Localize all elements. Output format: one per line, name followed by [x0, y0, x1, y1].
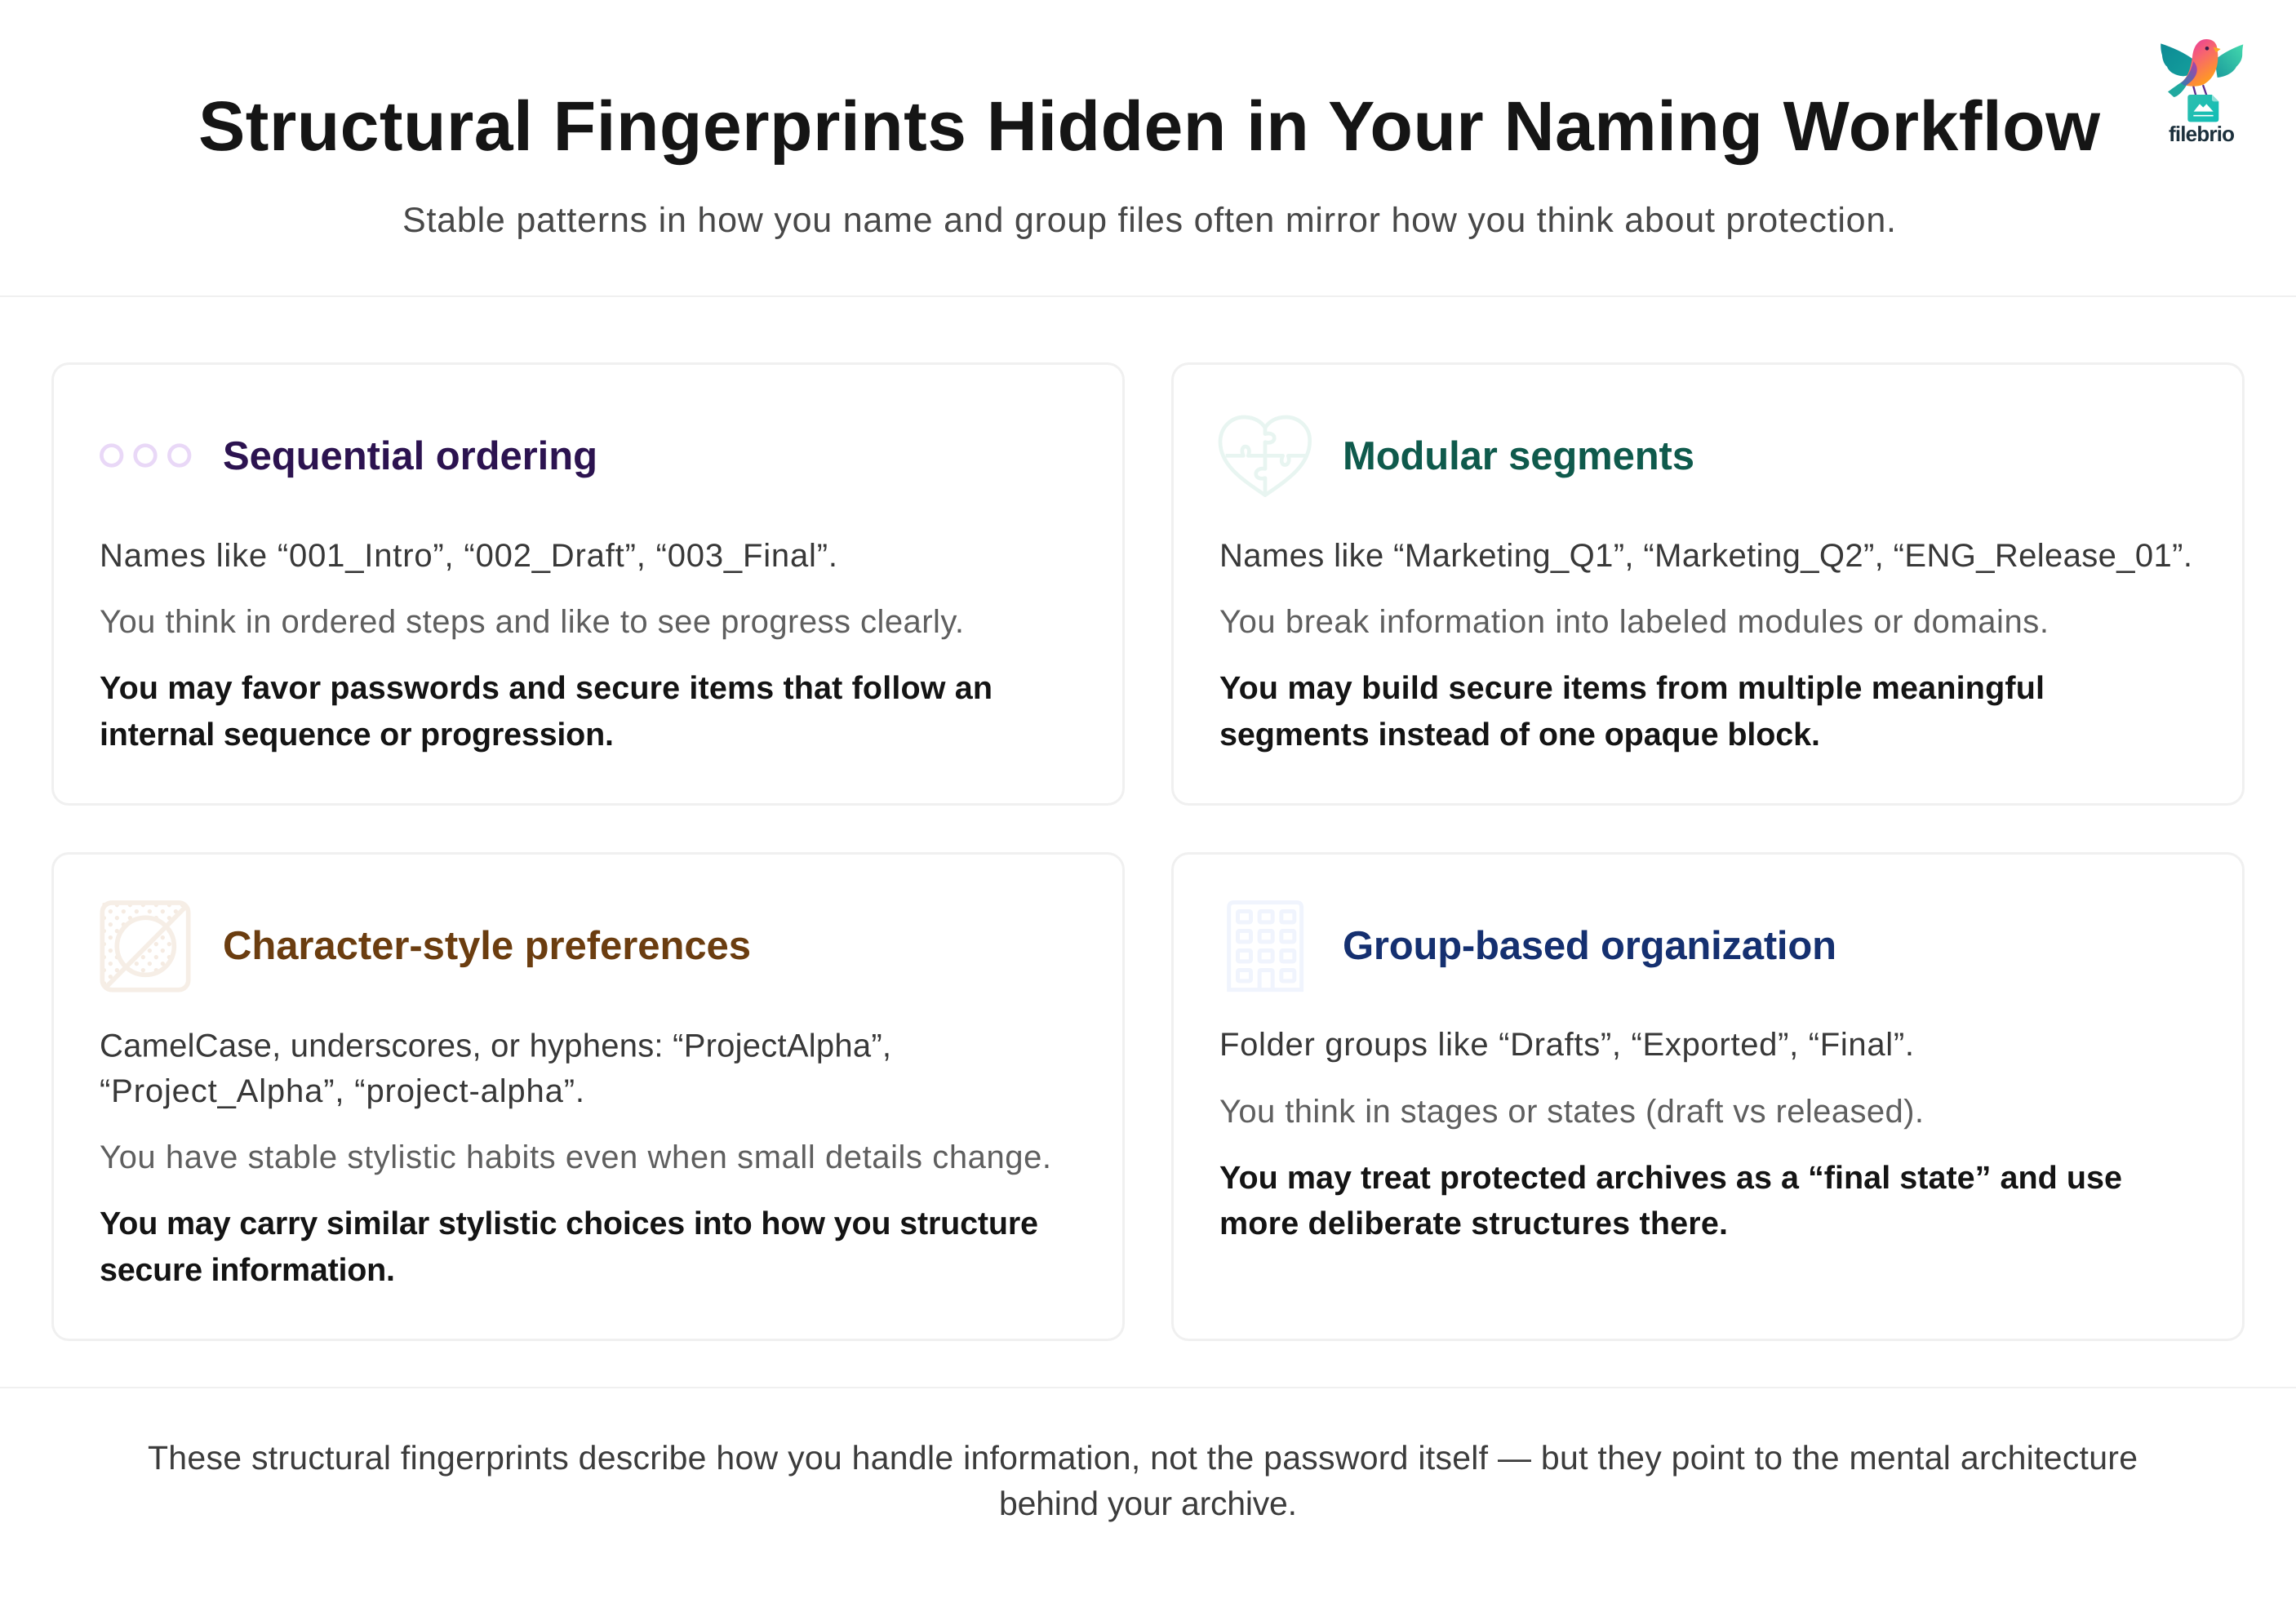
text: interpretation: You have stable stylistic habits even when small details change.	[100, 1139, 1051, 1175]
text: takeaway: secure information.	[100, 1252, 395, 1288]
heading: group-based organization: Group-based organization	[1343, 924, 1836, 968]
text: example: “Project_Alpha”, “project-alpha”.	[100, 1073, 584, 1109]
footer divider	[0, 1387, 2296, 1388]
text: example	[100, 1028, 891, 1109]
panel: character-style preferences	[52, 854, 1123, 1340]
heading: sequential ordering: Sequential ordering	[223, 434, 597, 478]
logo: filebrio bird: filebrio	[2169, 122, 2235, 146]
text: takeaway: segments instead of one opaque block.	[1219, 717, 1820, 753]
icon: puzzle heart	[1220, 417, 1310, 495]
text: takeaway	[100, 1206, 1038, 1288]
logo: filebrio bird	[2161, 39, 2243, 146]
heading: character-style preferences: Character-style preferences	[223, 924, 751, 968]
panel: sequential ordering	[52, 364, 1123, 805]
footer note: These structural fingerprints describe how you handle information, not the password itself — but they point to the mental architecture	[148, 1439, 2138, 1477]
text: interpretation: You think in stages or states (draft vs released).	[1219, 1094, 1924, 1130]
text: example: Names like “001_Intro”, “002_Draft”, “003_Final”.	[100, 538, 837, 574]
icon: three circles	[101, 446, 189, 465]
text: takeaway	[100, 670, 993, 753]
icon: dotted circle square	[102, 903, 189, 990]
text: takeaway: You may favor passwords and secure items that follow an	[100, 670, 993, 706]
header	[198, 87, 2101, 240]
text: interpretation: You think in ordered steps and like to see progress clearly.	[100, 604, 964, 640]
footer note: behind your archive.	[999, 1485, 1297, 1522]
text: takeaway: You may carry similar stylistic choices into how you structure	[100, 1206, 1038, 1241]
text: takeaway: You may treat protected archives as a “final state” and use	[1219, 1160, 2122, 1196]
text: example: Names like “Marketing_Q1”, “Marketing_Q2”, “ENG_Release_01”.	[1219, 538, 2192, 574]
panel: modular segments	[1172, 364, 2243, 805]
header divider	[0, 295, 2296, 297]
title: Structural Fingerprints Hidden in Your Naming Workflow	[198, 87, 2101, 166]
text: takeaway: internal sequence or progression.	[100, 717, 614, 753]
text: example: CamelCase, underscores, or hyphens: “ProjectAlpha”,	[100, 1028, 891, 1064]
text: takeaway	[1219, 1160, 2122, 1241]
footer note	[148, 1439, 2138, 1522]
text: takeaway: You may build secure items from multiple meaningful	[1219, 670, 2045, 706]
icon: building grid	[1227, 903, 1303, 992]
text: interpretation: You break information into labeled modules or domains.	[1219, 604, 2049, 640]
heading: modular segments: Modular segments	[1343, 434, 1694, 478]
panel: group-based organization	[1172, 854, 2243, 1340]
text: takeaway: more deliberate structures there.	[1219, 1206, 1728, 1241]
subtitle: Stable patterns in how you name and group files often mirror how you think about protection.	[402, 201, 1896, 240]
text: example: Folder groups like “Drafts”, “Exported”, “Final”.	[1219, 1027, 1914, 1063]
text: takeaway	[1219, 670, 2045, 753]
